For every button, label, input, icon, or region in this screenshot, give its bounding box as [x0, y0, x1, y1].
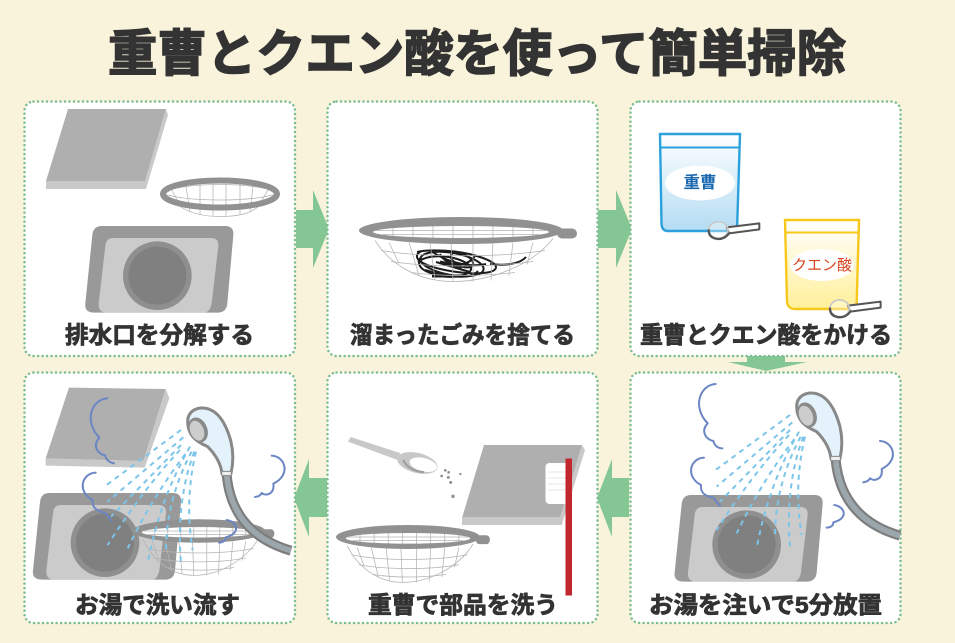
icon: shower with water [713, 393, 900, 548]
label: お湯を注いで5分放置 [649, 592, 882, 618]
icon: drain outlet [33, 493, 181, 580]
icon: toothbrush [546, 458, 572, 596]
arrow: step 1 to step 2 [296, 190, 329, 268]
icon: citric acid bag: クエン酸 [792, 257, 852, 274]
panel: step 6 rinse with hot water [24, 372, 295, 623]
icon: strainer basket [336, 525, 490, 582]
icon: drain cover [46, 109, 168, 189]
icon: steam [691, 384, 893, 528]
panel: step 1 disassemble drain [24, 102, 295, 356]
label: 重曹とクエン酸をかける [640, 322, 892, 348]
panel: step 4 pour hot water and wait [630, 372, 900, 623]
icon: steam [83, 398, 285, 543]
icon: drain cover [462, 445, 585, 525]
icon: baking soda bag: 重曹 [684, 173, 716, 192]
label: 排水口を分解する [65, 322, 254, 348]
icon: drain cover [46, 388, 169, 468]
panel: step 5 wash parts with baking soda [328, 372, 598, 623]
icon: strainer basket [133, 519, 274, 575]
icon: shower with water [104, 408, 291, 563]
icon: spoon with powder [348, 437, 461, 498]
icon: drain outlet [675, 495, 823, 582]
arrow: step 5 to step 6 [294, 459, 327, 537]
panel: step 3 apply baking soda and citric acid [630, 102, 900, 356]
title: 重曹とクエン酸を使って簡単掃除 [108, 26, 846, 82]
icon: strainer with hair [359, 217, 577, 282]
icon: drain outlet [85, 226, 233, 313]
icon: baking soda bag [660, 134, 740, 231]
label: 溜まったごみを捨てる [350, 321, 575, 348]
icon: spoon [709, 222, 759, 239]
icon: strainer basket [163, 180, 277, 216]
arrow: step 2 to step 3 [598, 190, 632, 268]
icon: hair clump [417, 248, 526, 280]
icon: citric acid bag [785, 220, 859, 309]
panel: step 2 discard debris [328, 102, 598, 356]
icon: spoon [830, 300, 881, 317]
label: 重曹で部品を洗う [368, 592, 558, 618]
label: お湯で洗い流す [75, 592, 240, 618]
arrow: step 3 to step 4 [728, 354, 807, 371]
arrow: step 4 to step 5 [597, 459, 629, 537]
